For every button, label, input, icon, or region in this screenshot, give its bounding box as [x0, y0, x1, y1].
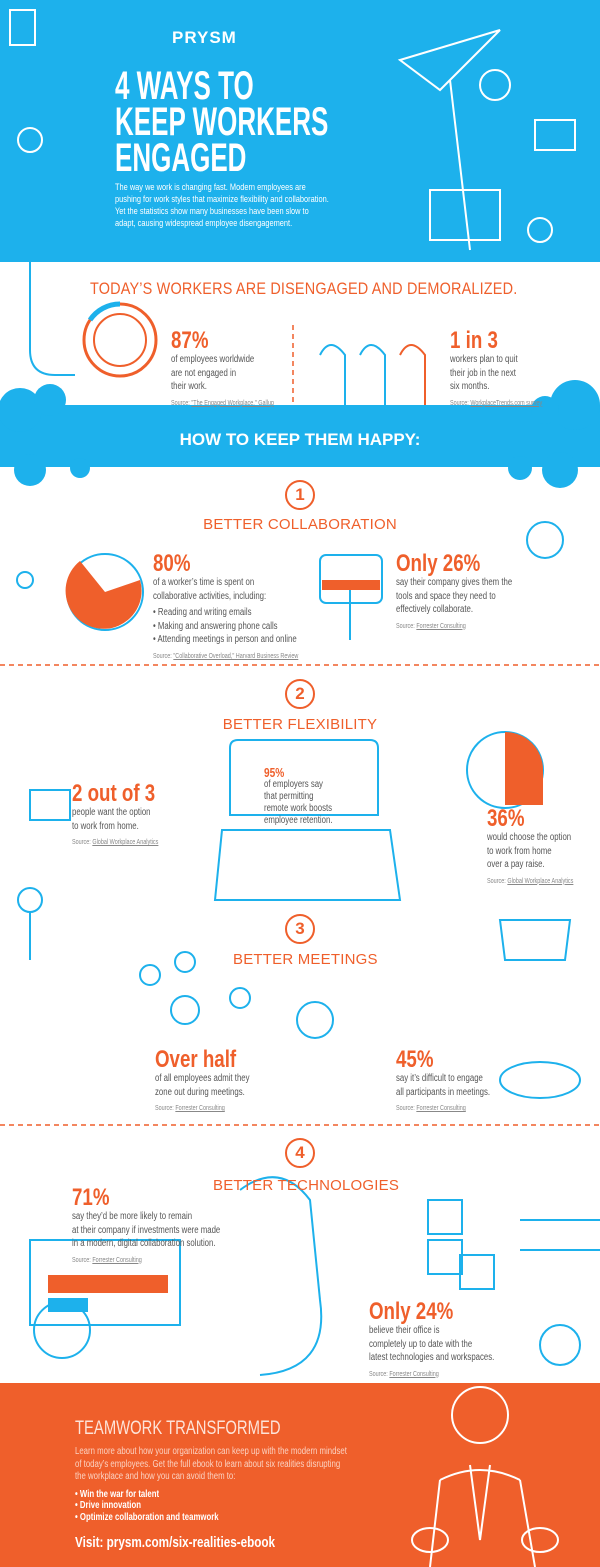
section heading: disengaged: TODAY’S WORKERS ARE DISENGAGED AND DEMORALIZED. [90, 279, 517, 298]
stat over half: zone out during meetings. [155, 1086, 245, 1098]
stat 1 in 3: six months. [450, 381, 489, 392]
stat 95% [264, 765, 333, 826]
stat 95%: of employers say [264, 779, 323, 790]
stat only 26%: tools and space they need to [396, 590, 496, 602]
intro text: Yet the statistics show many businesses have been slow to [115, 206, 309, 217]
footer text: of today’s employees. Get the full ebook to learn about six realities disrupting [75, 1458, 340, 1470]
stat 95%: 95% [264, 765, 284, 780]
stat only 24%: completely up to date with the [369, 1338, 472, 1350]
footer bullets: • Drive innovation [75, 1500, 141, 1511]
stat 2 out of 3: people want the option [72, 807, 150, 818]
footer: teamwork transformed [75, 1418, 347, 1551]
stat 36%: 36% [487, 805, 524, 832]
stat 36%: would choose the option [487, 832, 571, 843]
stat 71%: Source: Forrester Consulting [72, 1256, 142, 1264]
stat 45% [396, 1046, 490, 1112]
logo: PRYSM [172, 28, 237, 47]
stat 87%: their work. [171, 381, 207, 392]
stat 80%: collaborative activities, including: [153, 590, 266, 602]
stat 71% [72, 1184, 220, 1264]
footer link: Visit: prysm.com/six-realities-ebook [75, 1534, 275, 1551]
text: BETTER COLLABORATION [203, 516, 397, 533]
stat 87%: are not engaged in [171, 368, 236, 378]
section 1 [285, 480, 315, 510]
illustration: meditating man [411, 1386, 559, 1567]
stat over half [155, 1046, 250, 1112]
stat 87%: Source: "The Engaged Workplace," Gallup [171, 400, 274, 406]
stat 71%: say they’d be more likely to remain [72, 1211, 192, 1222]
stat 71%: 71% [72, 1184, 109, 1211]
stat 45%: all participants in meetings. [396, 1086, 490, 1098]
stat 95%: that permitting [264, 791, 313, 802]
intro text: adapt, causing widespread employee disengagement. [115, 218, 292, 229]
stat 71%: in a modern, digital collaboration solution. [72, 1238, 216, 1249]
stat 45%: say it’s difficult to engage [396, 1073, 483, 1084]
stat 80%: of a worker’s time is spent on [153, 577, 254, 588]
stat 80%: Source: "Collaborative Overload," Harvard Business Review [153, 652, 298, 660]
section 2 [285, 679, 315, 709]
stat 87% [171, 327, 274, 407]
title [115, 64, 328, 180]
stat 95%: employee retention. [264, 815, 333, 826]
stat 2 out of 3 [72, 780, 158, 846]
section 4 [285, 1138, 315, 1168]
section 3 [285, 914, 315, 944]
heading: how to keep: HOW TO KEEP THEM HAPPY: [180, 430, 420, 449]
section 4: 4 [295, 1143, 305, 1162]
stat 71%: at their company if investments were made [72, 1224, 220, 1236]
stat only 26%: Only 26% [396, 550, 480, 577]
stat 36%: to work from home [487, 846, 552, 856]
text: BETTER MEETINGS [233, 951, 378, 968]
stat 95%: remote work boosts [264, 803, 332, 814]
intro text: The way we work is changing fast. Modern employees are [115, 182, 306, 193]
stat only 24%: Only 24% [369, 1298, 453, 1325]
stat only 24%: believe their office is [369, 1325, 440, 1336]
stat 1 in 3: their job in the next [450, 368, 516, 378]
footer bullets: • Optimize collaboration and teamwork [75, 1512, 219, 1522]
stat 1 in 3: workers plan to quit [450, 354, 518, 365]
section 2: 2 [295, 684, 305, 703]
section 3: 3 [295, 919, 305, 938]
stat 45%: 45% [396, 1046, 433, 1073]
stat over half: of all employees admit they [155, 1073, 250, 1084]
stat 1 in 3 [450, 327, 542, 407]
stat 80%: • Making and answering phone calls [153, 620, 278, 632]
stat over half: Over half [155, 1046, 236, 1073]
stat 80%: 80% [153, 550, 190, 577]
footer text: Learn more about how your organization can keep up with the modern mindset [75, 1446, 347, 1457]
stat only 26%: effectively collaborate. [396, 604, 473, 615]
text: BETTER TECHNOLOGIES [213, 1177, 399, 1194]
stat 45%: Source: Forrester Consulting [396, 1105, 466, 1112]
footer text [75, 1446, 347, 1482]
stat 36% [487, 805, 574, 885]
stat only 24%: Source: Forrester Consulting [369, 1370, 439, 1378]
stat only 24% [369, 1298, 494, 1378]
stat only 26%: say their company gives them the [396, 577, 512, 588]
stat 2 out of 3: to work from home. [72, 820, 139, 832]
stat only 26% [396, 550, 512, 630]
intro text [115, 182, 329, 229]
intro text: pushing for work styles that maximize flexibility and collaboration. [115, 194, 329, 205]
title: KEEP WORKERS [115, 100, 328, 144]
section 1: 1 [295, 485, 305, 504]
footer heading: TEAMWORK TRANSFORMED [75, 1418, 281, 1439]
footer bullets: • Win the war for talent [75, 1488, 159, 1500]
footer text: the workplace and how you can avoid them to: [75, 1471, 235, 1482]
title: 4 WAYS TO [115, 64, 254, 108]
stat over half: Source: Forrester Consulting [155, 1105, 225, 1112]
footer bullets [75, 1488, 219, 1522]
stat 80%: • Attending meetings in person and online [153, 634, 297, 645]
stat 87%: 87% [171, 327, 208, 354]
stat only 24%: latest technologies and workspaces. [369, 1352, 494, 1363]
stat 87%: of employees worldwide [171, 354, 254, 365]
stat 2 out of 3: Source: Global Workplace Analytics [72, 839, 158, 846]
stat 80%: • Reading and writing emails [153, 607, 252, 618]
stat 1 in 3: Source: WorkplaceTrends.com survey [450, 400, 542, 406]
stat 36%: over a pay raise. [487, 859, 545, 870]
stat only 26%: Source: Forrester Consulting [396, 622, 466, 630]
stat 36%: Source: Global Workplace Analytics [487, 878, 573, 884]
stat 2 out of 3: 2 out of 3 [72, 780, 155, 807]
stat 80% [153, 550, 298, 660]
text: BETTER FLEXIBILITY [223, 716, 377, 733]
title: ENGAGED [115, 136, 246, 180]
stat 1 in 3: 1 in 3 [450, 327, 498, 354]
